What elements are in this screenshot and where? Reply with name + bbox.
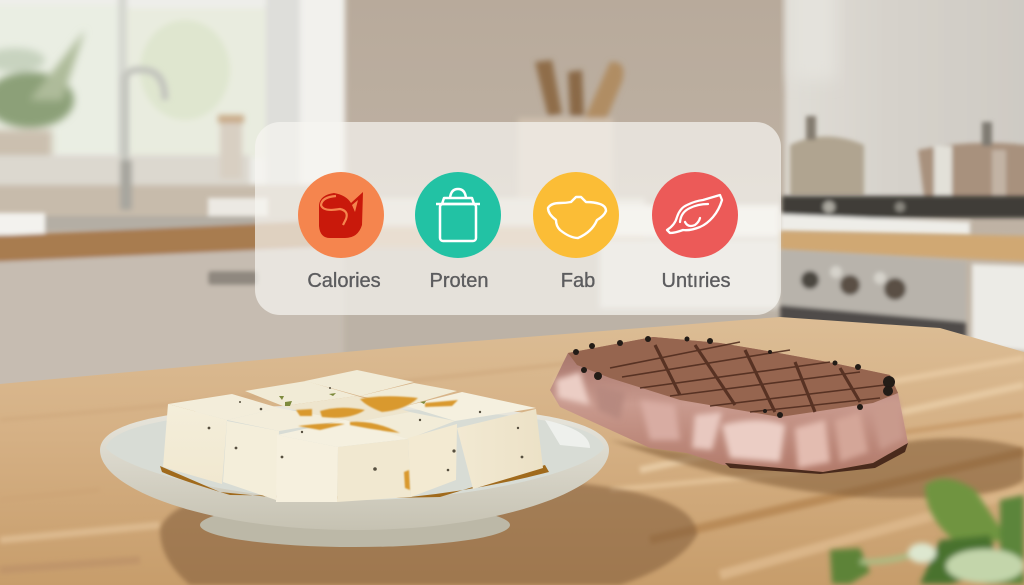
plate with tofu	[100, 370, 609, 547]
sauce pool	[160, 465, 549, 500]
pots	[790, 116, 1024, 204]
sill and faucet	[0, 70, 345, 219]
grill marks	[610, 342, 885, 412]
foreground herb	[830, 479, 1024, 584]
icon: protein	[415, 172, 501, 258]
steak body	[550, 337, 908, 472]
utensils and jar	[518, 60, 624, 203]
seared top	[568, 337, 898, 417]
tile wall	[785, 0, 1024, 200]
label: calories: Calories	[307, 270, 381, 292]
right tofu block	[406, 392, 543, 497]
right counter	[780, 231, 1024, 352]
drizzled sauce	[296, 396, 458, 490]
pepper specks and herbs	[208, 387, 523, 471]
label: nutrients: Untıries	[662, 270, 730, 292]
centre counter	[345, 198, 780, 358]
stove	[780, 250, 966, 338]
left counter and cabinets	[0, 198, 345, 390]
icon: calories	[298, 172, 384, 258]
grilled steak	[550, 336, 908, 474]
panel background	[255, 122, 781, 315]
light tile patch	[790, 0, 836, 80]
hob	[780, 196, 1024, 236]
plate	[100, 405, 609, 547]
label: protein: Proten	[430, 270, 488, 292]
label: fat: Fab	[561, 270, 595, 292]
icon: fat	[533, 172, 619, 258]
shadow: steak	[610, 438, 1024, 498]
steak underside	[725, 443, 908, 474]
shadow: plate	[160, 480, 697, 585]
left tofu block	[163, 394, 279, 484]
back tofu blocks	[245, 370, 457, 439]
icon: nutrients	[652, 172, 738, 258]
charred edges	[573, 336, 895, 418]
second tofu block	[223, 408, 345, 500]
background: blurred kitchen	[0, 0, 1024, 400]
fatty side highlights	[556, 372, 904, 468]
panel: nutrition legend	[255, 122, 781, 315]
wooden table	[0, 317, 1024, 585]
window and frame	[0, 0, 345, 190]
potted plant	[0, 30, 85, 192]
front tofu block	[276, 420, 411, 502]
